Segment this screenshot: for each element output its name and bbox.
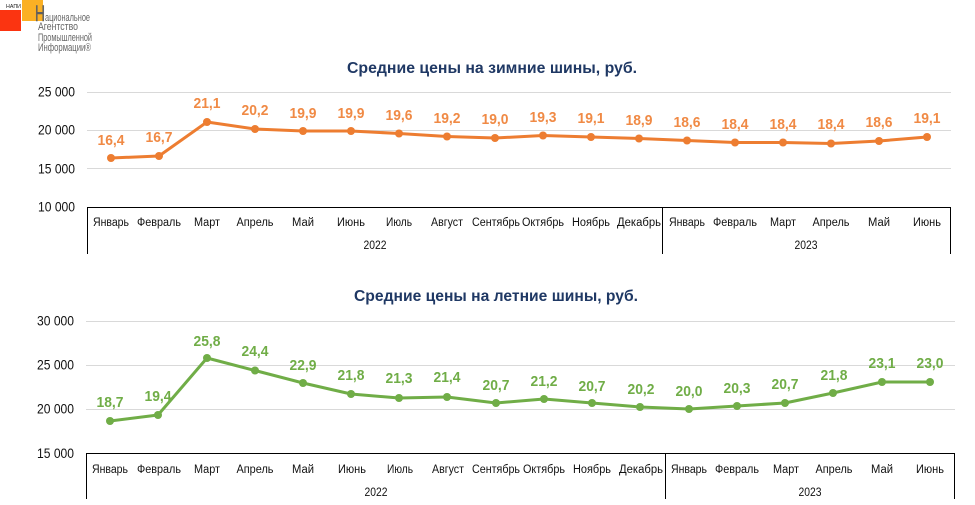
orange data labels: 19,6 — [386, 108, 412, 124]
y axis labels: 30 000 — [37, 314, 74, 328]
green line series — [106, 354, 934, 425]
green data labels: 21,4 — [434, 370, 460, 386]
x axis frame and months: 2023 — [798, 487, 822, 499]
x axis frame and months: Ноябрь — [573, 464, 611, 476]
logo: НАПИ — [6, 4, 21, 10]
green data labels: 20,2 — [628, 382, 654, 398]
orange data labels: 19,1 — [914, 111, 940, 127]
orange data labels: 18,4 — [770, 117, 796, 133]
green data labels: 23,1 — [868, 356, 896, 372]
logo — [0, 0, 92, 54]
x axis frame and months: Март — [194, 464, 221, 476]
x axis frame and months: Март — [194, 217, 221, 229]
y axis labels — [38, 84, 75, 214]
orange data labels: 19,9 — [338, 106, 364, 122]
green data labels: 23,0 — [916, 356, 944, 372]
orange data labels: 19,3 — [530, 110, 556, 126]
x axis frame and months: Август — [432, 464, 465, 476]
orange data labels: 18,6 — [674, 115, 700, 131]
orange data labels: 19,9 — [290, 106, 316, 122]
logo: Промышленной — [38, 32, 92, 44]
x axis frame and months: Май — [871, 464, 893, 476]
x axis frame and months: Июнь — [338, 464, 366, 476]
y axis labels: 10 000 — [38, 200, 75, 214]
x axis frame and months: Январь — [93, 217, 129, 229]
x axis frame and months: Июнь — [337, 217, 365, 229]
orange data labels: 16,4 — [98, 133, 124, 149]
x axis frame and months: Январь — [669, 217, 705, 229]
x axis frame and months: Май — [292, 464, 314, 476]
x axis frame and months: Март — [770, 217, 797, 229]
x axis frame and months: Май — [292, 217, 314, 229]
orange line series — [107, 118, 931, 162]
x axis frame and months: Январь — [92, 464, 128, 476]
x axis frame and months — [86, 454, 954, 499]
logo: ациональное — [45, 12, 90, 24]
x axis frame and months: Октябрь — [523, 464, 565, 476]
chart: winter tyres — [38, 60, 951, 254]
title: winter tyres: Средние цены на зимние шины, руб. — [347, 60, 637, 77]
green data labels: 21,8 — [820, 368, 848, 384]
green data labels: 21,2 — [530, 374, 558, 390]
y axis labels: 15 000 — [37, 446, 74, 461]
orange data labels: 19,1 — [578, 111, 604, 127]
x axis frame and months: Май — [868, 217, 890, 229]
y axis labels: 25 000 — [37, 358, 74, 372]
x axis frame and months: Октябрь — [522, 217, 564, 229]
x axis frame and months: Июль — [387, 464, 413, 476]
orange data labels: 18,6 — [866, 115, 892, 131]
x axis frame and months: Август — [431, 217, 464, 229]
x axis frame and months: Февраль — [715, 464, 759, 476]
title: summer tyres: Средние цены на летние шины, руб. — [354, 288, 638, 305]
green data labels: 20,0 — [676, 384, 702, 400]
orange data labels: 19,0 — [482, 112, 508, 128]
orange data labels: 18,4 — [818, 117, 844, 133]
logo: Агентство — [38, 21, 78, 33]
y axis labels: 15 000 — [38, 162, 75, 176]
y axis labels: 25 000 — [38, 84, 75, 100]
green data labels: 22,9 — [290, 358, 316, 374]
x axis frame and months: Сентябрь — [472, 464, 520, 476]
x axis frame and months: Июнь — [916, 464, 944, 476]
y axis labels: 20 000 — [37, 402, 74, 416]
green data labels: 21,8 — [338, 368, 364, 384]
y axis labels: 20 000 — [38, 122, 75, 138]
green data labels: 25,8 — [194, 334, 220, 350]
x axis frame and months: Февраль — [713, 217, 757, 229]
green data labels: 20,7 — [482, 378, 510, 394]
orange data labels: 16,7 — [146, 130, 172, 146]
green data labels: 19,4 — [144, 389, 172, 405]
green data labels: 21,3 — [386, 371, 412, 387]
x axis frame and months: 2022 — [364, 487, 388, 499]
x axis frame and months: 2023 — [794, 240, 818, 252]
logo: Н — [35, 1, 45, 26]
x axis frame and months: Январь — [671, 464, 707, 476]
orange data labels: 18,9 — [626, 113, 652, 129]
x axis frame and months: 2022 — [364, 240, 386, 252]
x axis frame and months: Апрель — [812, 217, 850, 229]
orange data labels: 18,4 — [722, 117, 748, 133]
orange data labels: 19,2 — [434, 111, 460, 127]
green data labels: 24,4 — [242, 344, 268, 360]
x axis frame and months: Март — [773, 464, 800, 476]
x axis frame and months: Декабрь — [617, 217, 661, 229]
green data labels: 18,7 — [96, 395, 124, 411]
y axis labels — [37, 314, 74, 461]
green data labels: 20,3 — [724, 381, 750, 397]
green data labels: 20,7 — [578, 379, 606, 395]
x axis frame and months: Июль — [386, 217, 412, 229]
x axis frame and months: Июнь — [913, 217, 941, 229]
orange data labels: 20,2 — [242, 103, 268, 119]
x axis frame and months: Февраль — [137, 217, 181, 229]
x axis frame and months: Апрель — [236, 464, 274, 476]
green data labels — [96, 334, 944, 411]
x axis frame and months: Декабрь — [619, 464, 663, 476]
orange data labels — [98, 96, 940, 149]
x axis frame and months — [88, 208, 950, 254]
orange data labels: 21,1 — [194, 96, 220, 112]
x axis frame and months: Апрель — [236, 217, 274, 229]
green data labels: 20,7 — [772, 377, 798, 393]
x axis frame and months: Апрель — [816, 464, 853, 476]
x axis frame and months: Ноябрь — [572, 217, 610, 229]
chart: summer tyres — [37, 288, 955, 499]
logo: Информации® — [38, 42, 91, 54]
x axis frame and months: Февраль — [137, 464, 181, 476]
x axis frame and months: Сентябрь — [472, 217, 520, 229]
